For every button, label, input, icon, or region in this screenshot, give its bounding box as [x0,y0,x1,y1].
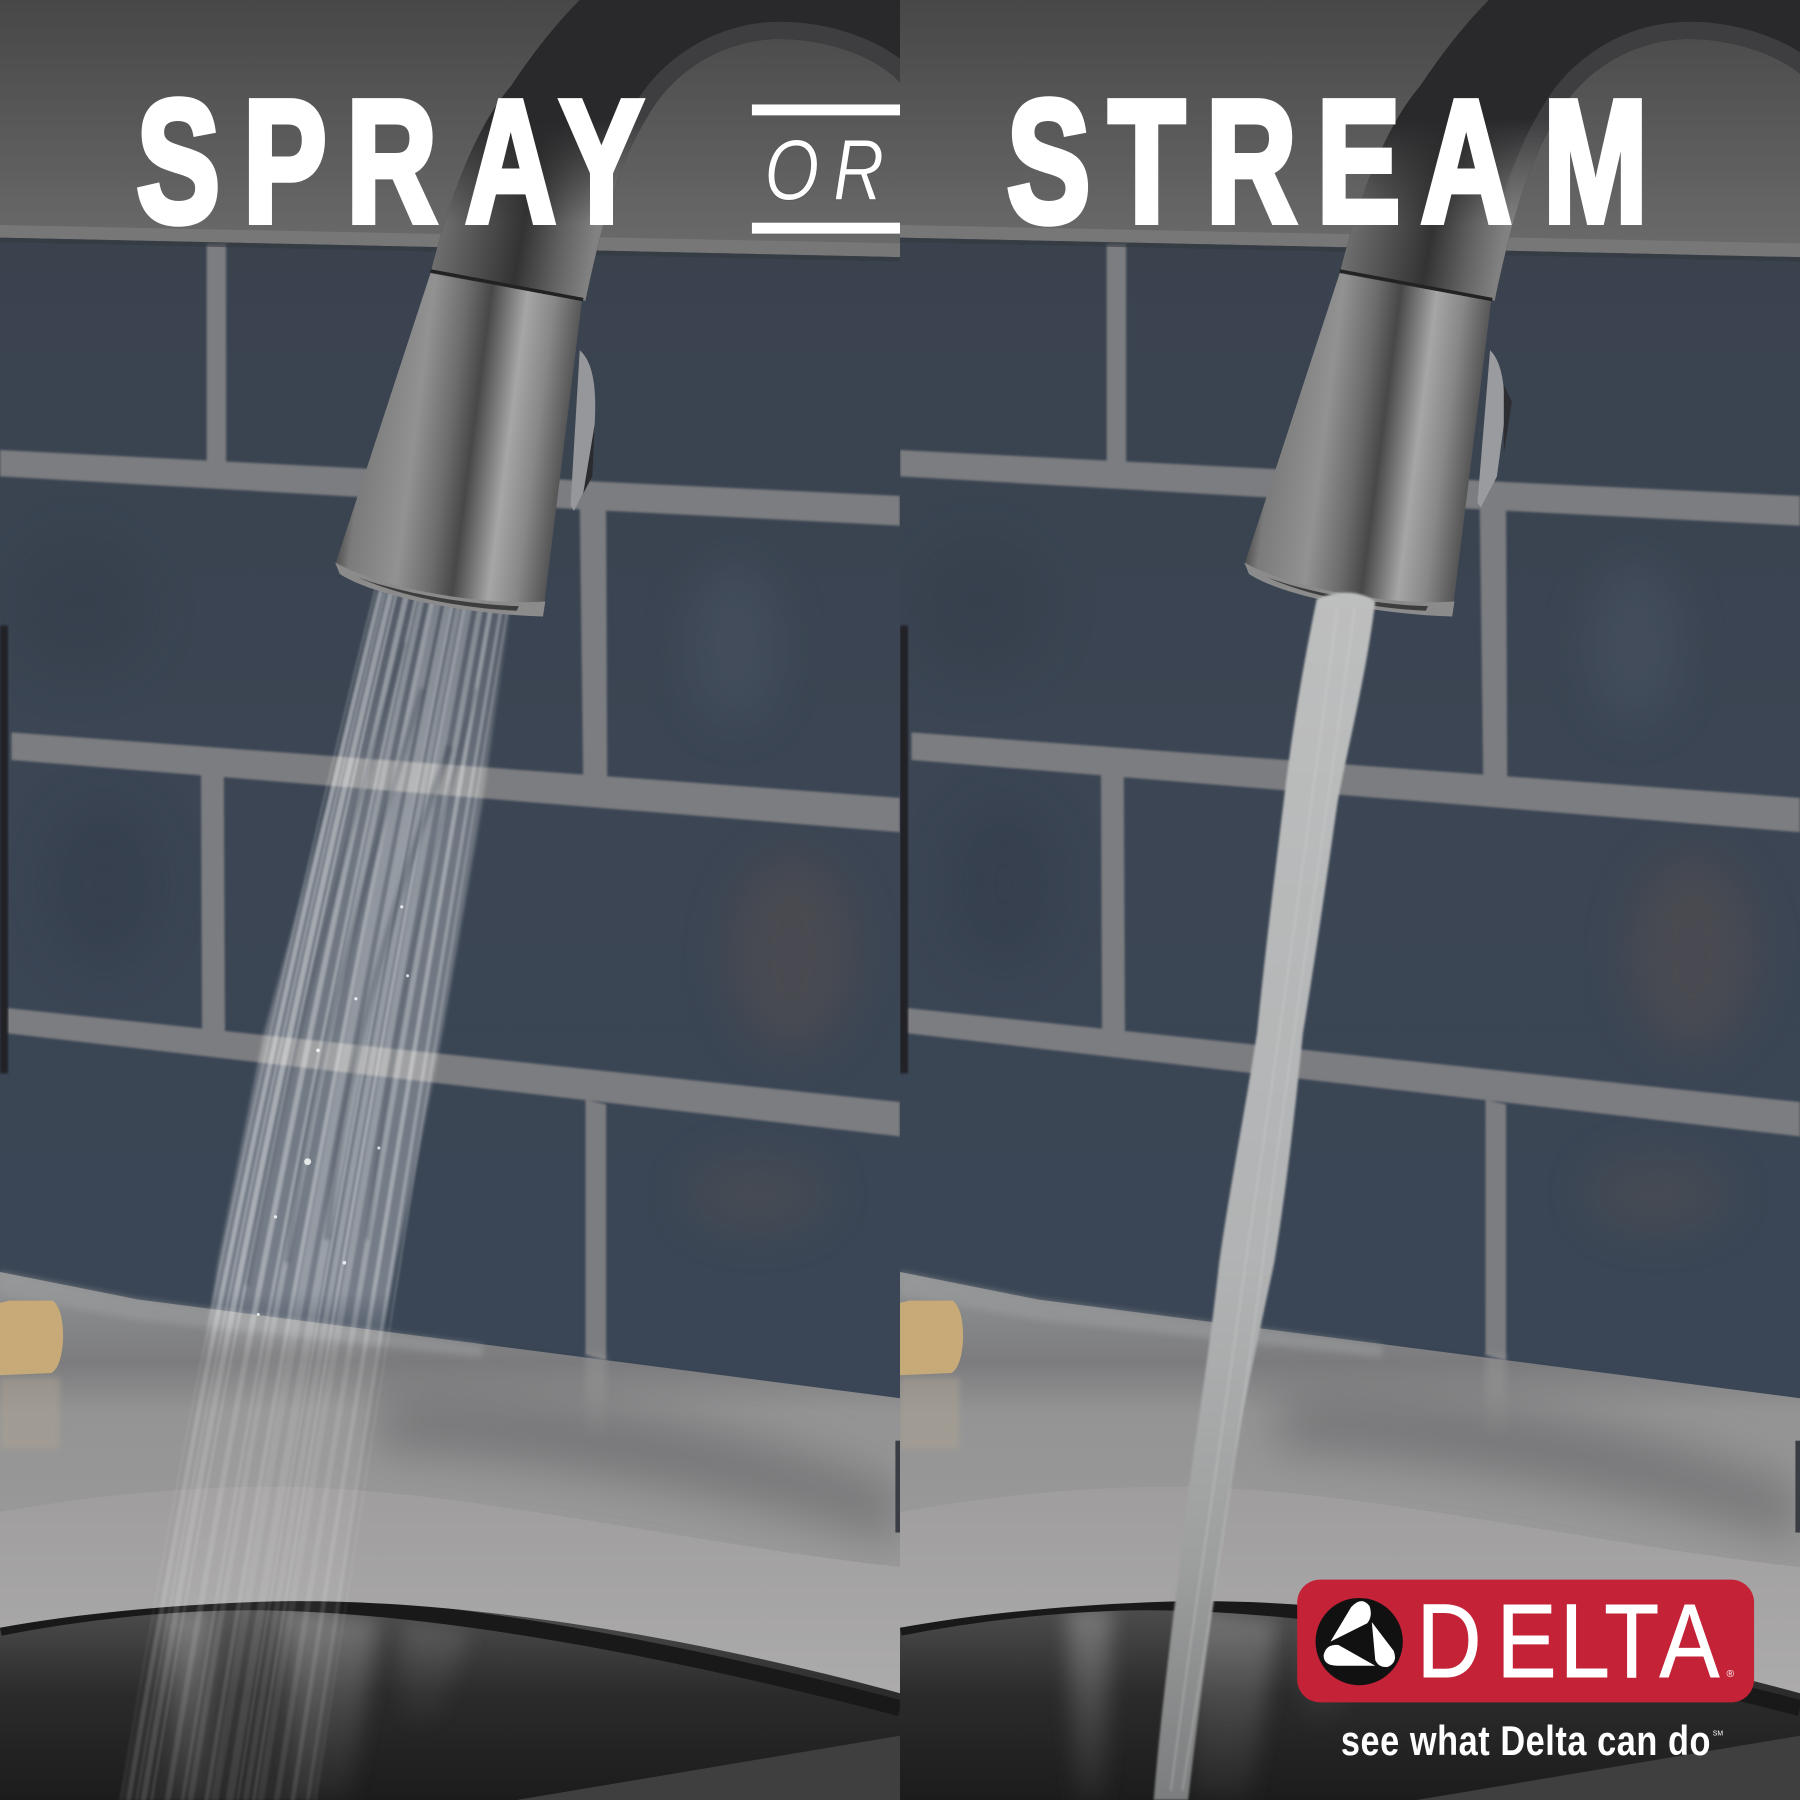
stream streaks [1170,1395,1244,1790]
water spray streams [121,585,511,1800]
spray head faucet [335,0,900,616]
panel: spray water [121,0,900,1800]
spray head button [571,350,595,511]
registered mark: ® [1727,1669,1735,1680]
word OR: OR [764,122,884,218]
stream head faucet [1244,0,1800,616]
panel: stream water [1154,0,1800,1800]
photo background: stream panel [900,0,1800,1800]
logo: Delta badge [1297,1580,1754,1702]
water spray haze [121,591,511,1800]
heading: SPRAY: SPRAY [136,64,643,259]
tagline: see what Delta can do [1341,1719,1711,1765]
service mark: SM [1713,1731,1723,1738]
water droplets [257,905,409,1316]
wordmark DELTA: DELTA [1417,1583,1719,1700]
connector: OR with rules [752,104,900,234]
heading: STREAM: STREAM [1007,64,1648,259]
solid water stream [1154,593,1375,1800]
dark gaps between streams [247,643,476,1286]
icon: Delta emblem [1316,1598,1403,1685]
photo background: spray panel [0,0,900,1800]
stream head button [1477,350,1504,507]
